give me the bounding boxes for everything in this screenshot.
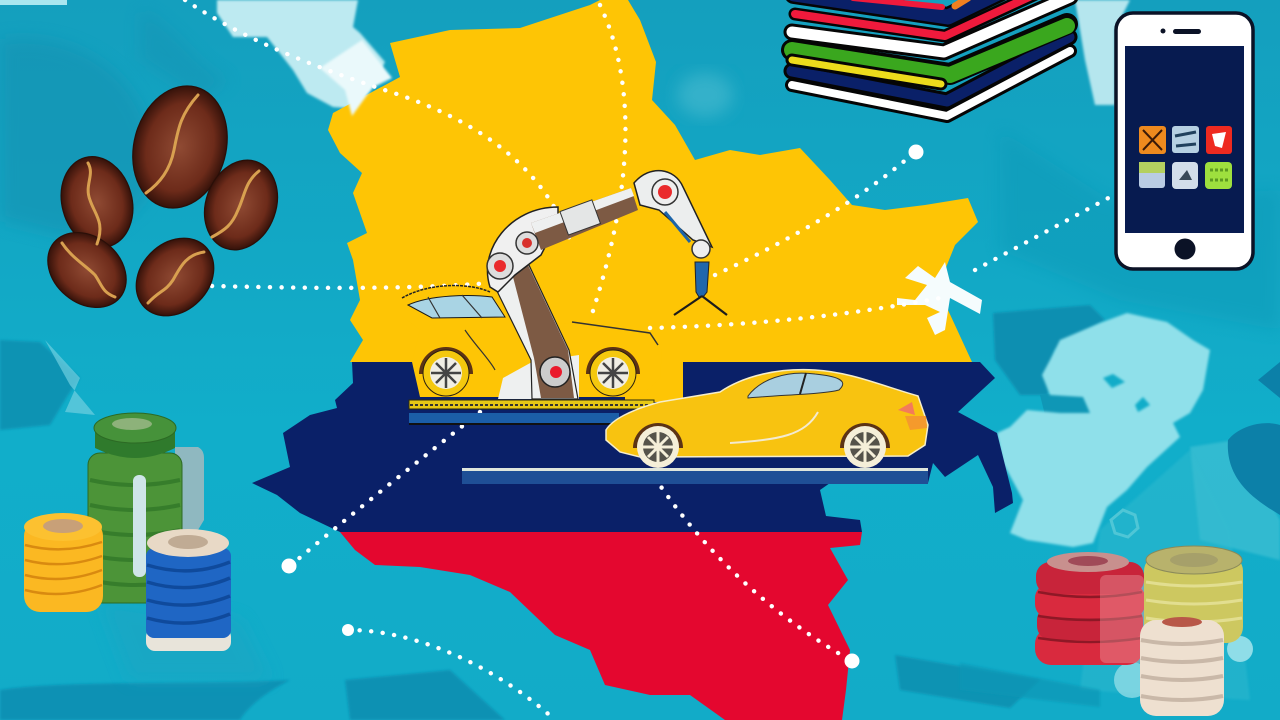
icon: blue thread spool <box>146 529 231 651</box>
finished yellow car <box>606 370 928 468</box>
lower arm <box>493 263 578 399</box>
route end markers <box>282 144 924 668</box>
icon: stack of textile folders <box>792 0 1070 116</box>
white accents: airplane splash right <box>897 262 982 335</box>
pale splash: top left <box>217 0 385 108</box>
book: navy <box>792 37 1069 101</box>
arm base <box>498 355 579 399</box>
map region: yellow <box>328 0 978 362</box>
white accents: coastline splash top <box>320 40 392 116</box>
joints <box>487 179 710 387</box>
book: green and yellow <box>792 24 1067 84</box>
icon: red thread spool <box>1035 552 1145 665</box>
map: Colombia flag colours <box>252 0 1013 720</box>
pale splash: right <box>997 313 1210 547</box>
icon: coffee beans <box>33 75 290 331</box>
book: navy top <box>794 0 1000 17</box>
icon: grey spool behind <box>175 447 204 530</box>
curved shoulder <box>487 207 558 292</box>
icon: green thread spool <box>88 413 182 603</box>
app icons <box>1139 126 1232 189</box>
book: red top <box>853 0 942 7</box>
map region: navy <box>252 362 1013 532</box>
yellow block behind first car <box>625 361 683 402</box>
dotted routes <box>185 0 1112 720</box>
book: bottom white <box>792 51 1070 116</box>
book: white <box>792 0 1070 52</box>
upper arm <box>531 188 638 250</box>
icon: smartphone <box>1116 13 1253 269</box>
robot arm <box>487 171 727 399</box>
icon: pale yellow thread spool <box>1144 546 1243 643</box>
conveyor belt: lower <box>462 468 928 484</box>
car on robot line <box>402 286 662 397</box>
icon: cream thread spool <box>1140 617 1224 716</box>
book: red <box>795 0 1040 36</box>
map region: red <box>340 532 862 720</box>
gripper <box>695 262 709 297</box>
conveyor belt: upper <box>409 400 654 425</box>
icon: yellow thread spool <box>24 513 103 612</box>
forearm <box>634 171 712 247</box>
